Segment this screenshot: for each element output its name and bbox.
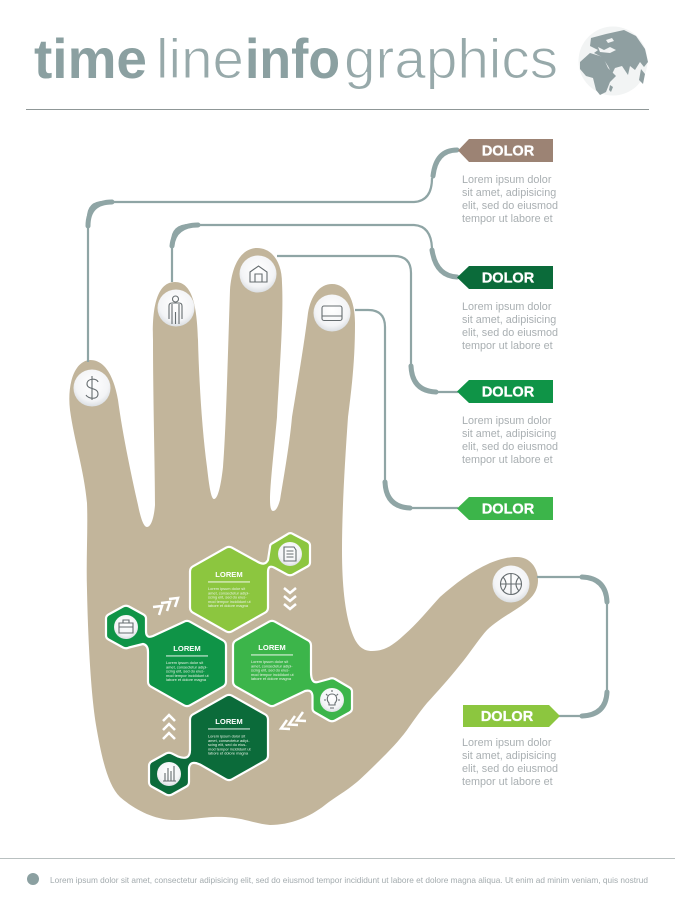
tag 1: DOLOR [482,144,535,160]
title [34,27,558,90]
text block 3: tempor ut labore et [462,454,553,466]
title: line [156,27,244,90]
text block 5: tempor ut labore et [462,776,553,788]
arrows: up [163,715,175,739]
arrows: up-right [153,598,178,615]
footer text: Lorem ipsum dolor sit amet, consectetur adipisicing elit, sed do eiusmod tempor incididunt ut labore et dolore magna aliqua. Ut enim ad minim veniam, quis nostrud [50,875,648,885]
connector 1 [88,150,457,362]
hexagon: bottom: labore et dolore magna [208,751,249,756]
footer bullet [27,873,39,885]
panel: hexagon cycle [106,533,352,795]
hexagon: top: labore et dolore magna [208,603,249,608]
tag 1 [458,139,553,162]
connector 5 [537,577,607,716]
title: graphics [344,27,558,90]
hexagon: right: labore et dolore magna [251,676,292,681]
connector 2 [172,225,457,282]
tag 2 [457,266,553,289]
hexagon: top: mod tempor incididunt ut [208,599,252,604]
tag 5 [463,705,560,727]
text block 2: sit amet, adipisicing [462,314,556,326]
hexagon: right: Lorem ipsum dolor sit [251,659,289,664]
hexagon: bottom [149,695,268,795]
hexagon: right [233,621,352,721]
hexagon: bottom: scing elit, sed do eius- [208,742,247,747]
text block 1: sit amet, adipisicing [462,187,556,199]
icon: person circle [158,290,194,326]
hexagon: right: scing elit, sed do eius- [251,668,290,673]
connector 3 [277,256,458,392]
text block 1: tempor ut labore et [462,213,553,225]
hexagon: bottom: mod tempor incididunt ut [208,746,252,751]
text block 3: elit, sed do eiusmod [462,441,558,453]
hexagon: left [106,606,226,706]
footer rule [0,858,675,859]
hexagon: right: LOREM [258,643,286,652]
text block 5: sit amet, adipisicing [462,750,556,762]
hexagon: left: Lorem ipsum dolor sit [166,660,204,665]
hexagon: left: LOREM [173,644,201,653]
text block 1: elit, sed do eiusmod [462,200,558,212]
text block 3: Lorem ipsum dolor [462,415,552,427]
icon: dollar circle [74,370,110,406]
text block 5: elit, sed do eiusmod [462,763,558,775]
text block 2: tempor ut labore et [462,340,553,352]
tag 3: DOLOR [482,384,535,400]
title: info [245,27,340,90]
hexagon: top: amet, consectetur adipi- [208,590,250,595]
hexagon: bottom: amet, consectetur adipi- [208,738,250,743]
text block 2: Lorem ipsum dolor [462,301,552,313]
hexagon: top: Lorem ipsum dolor sit [208,586,246,591]
text block 2: elit, sed do eiusmod [462,327,558,339]
arrows: down [284,588,296,609]
connector 4 [355,310,458,508]
hexagon: right: amet, consectetur adipi- [251,663,293,668]
tag 5: DOLOR [481,709,534,725]
arrows: down-left [281,712,306,729]
hexagon: left: mod tempor incididunt ut [166,673,210,678]
hexagon: left: labore et dolore magna [166,677,207,682]
icon: card circle [314,294,350,332]
hexagon: bottom: Lorem ipsum dolor sit [208,734,246,738]
title: time [34,27,147,90]
tag 3 [457,380,553,403]
hexagon: top [190,533,310,632]
hexagon: right: mod tempor incididunt ut [251,672,295,677]
text block 1: Lorem ipsum dolor [462,174,552,186]
tag 2: DOLOR [482,270,535,286]
hexagon: top: scing elit, sed do eius- [208,595,247,600]
text block 3: sit amet, adipisicing [462,428,556,440]
icon: globe [578,26,648,96]
hexagon: left: scing elit, sed do eius- [166,669,205,674]
text block 5: Lorem ipsum dolor [462,737,552,749]
hand [69,248,538,825]
hexagon: left: amet, consectetur adipi- [166,664,208,669]
header rule [26,109,649,110]
hexagon: top: LOREM [215,570,243,579]
icon: house circle [240,256,276,292]
tag 4 [457,497,553,520]
hexagon: bottom: LOREM [215,717,243,726]
icon: ball circle [492,566,530,602]
tag 4: DOLOR [482,502,535,518]
